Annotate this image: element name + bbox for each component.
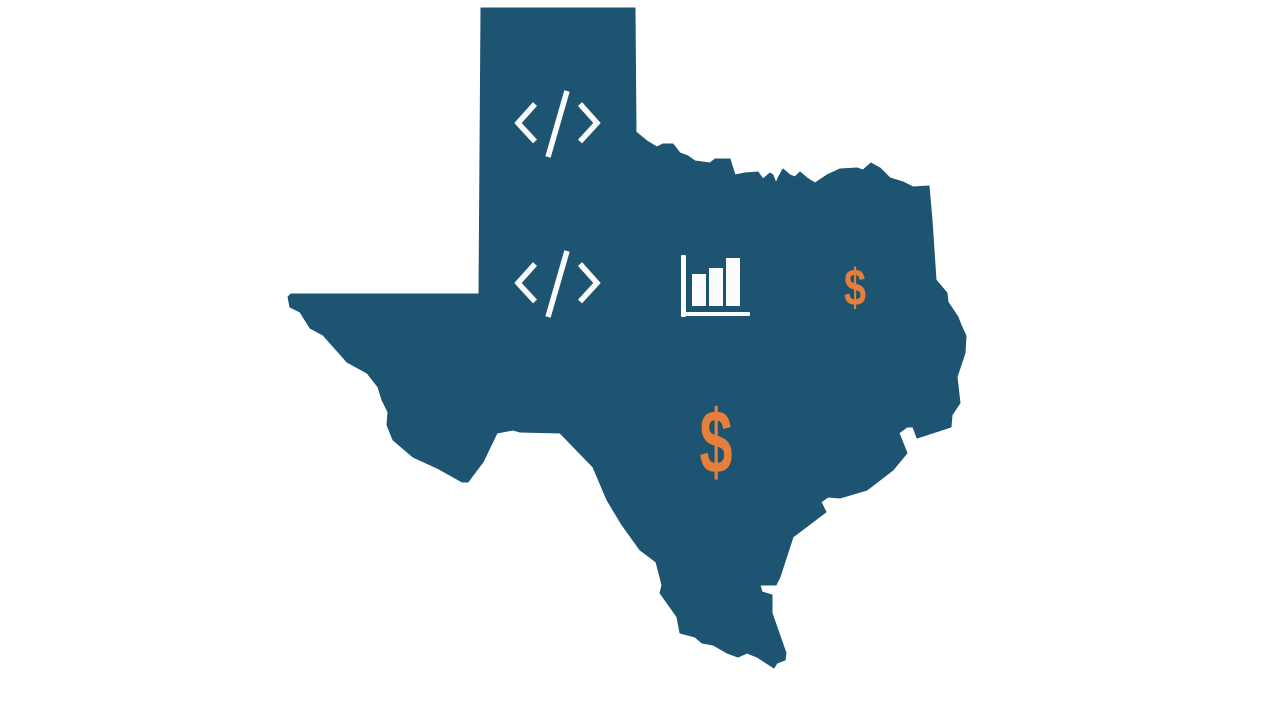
icon: code brackets, central: [518, 251, 597, 317]
icon: small dollar sign: $: [844, 258, 866, 316]
map: Texas silhouette: [288, 8, 966, 668]
icon: bar chart: [681, 255, 750, 317]
icon: code brackets, panhandle: [518, 91, 597, 157]
icon: large dollar sign: $: [699, 393, 733, 493]
